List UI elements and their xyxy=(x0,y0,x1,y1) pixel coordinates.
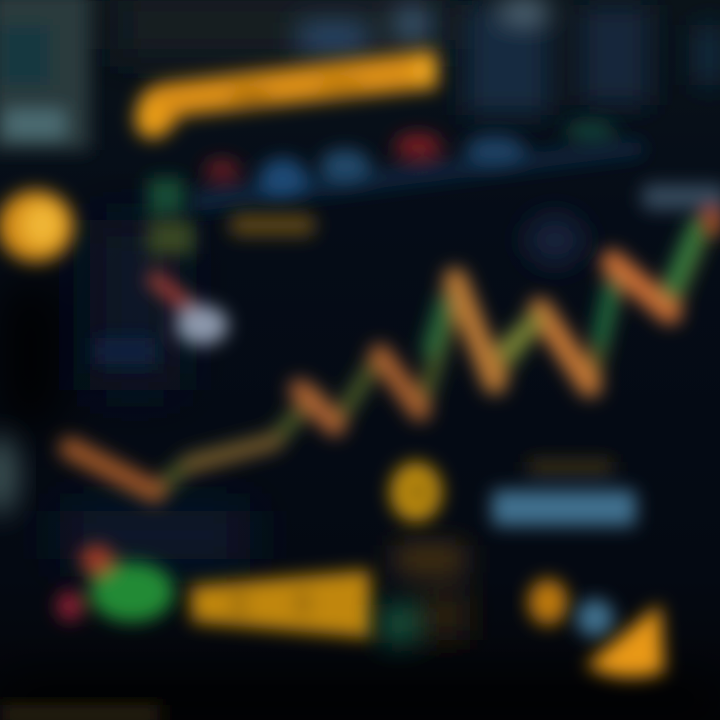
line chart: main zigzag xyxy=(70,215,710,492)
icon: orange triangle xyxy=(586,604,664,677)
icon: small orange dot xyxy=(528,579,568,625)
icon: glowing yellow coin xyxy=(0,190,74,262)
icon: blue circle shadow xyxy=(525,214,585,266)
top-right badge xyxy=(642,184,720,237)
bottom-left glow xyxy=(0,705,160,720)
label: blue text block xyxy=(492,460,636,526)
icon: blue spot xyxy=(576,599,614,637)
icon: yellow dot xyxy=(390,462,442,522)
left edge grey circle xyxy=(0,435,18,515)
panel: top-left monitor xyxy=(0,0,90,150)
left mini chart xyxy=(95,178,315,364)
small bar chart xyxy=(382,545,470,643)
heading bar xyxy=(135,50,438,139)
label: yellow text bar xyxy=(190,570,372,638)
row of coloured tabs xyxy=(190,122,645,212)
panel: top-right columns xyxy=(298,0,720,115)
icon: colored pie cluster xyxy=(57,545,174,622)
